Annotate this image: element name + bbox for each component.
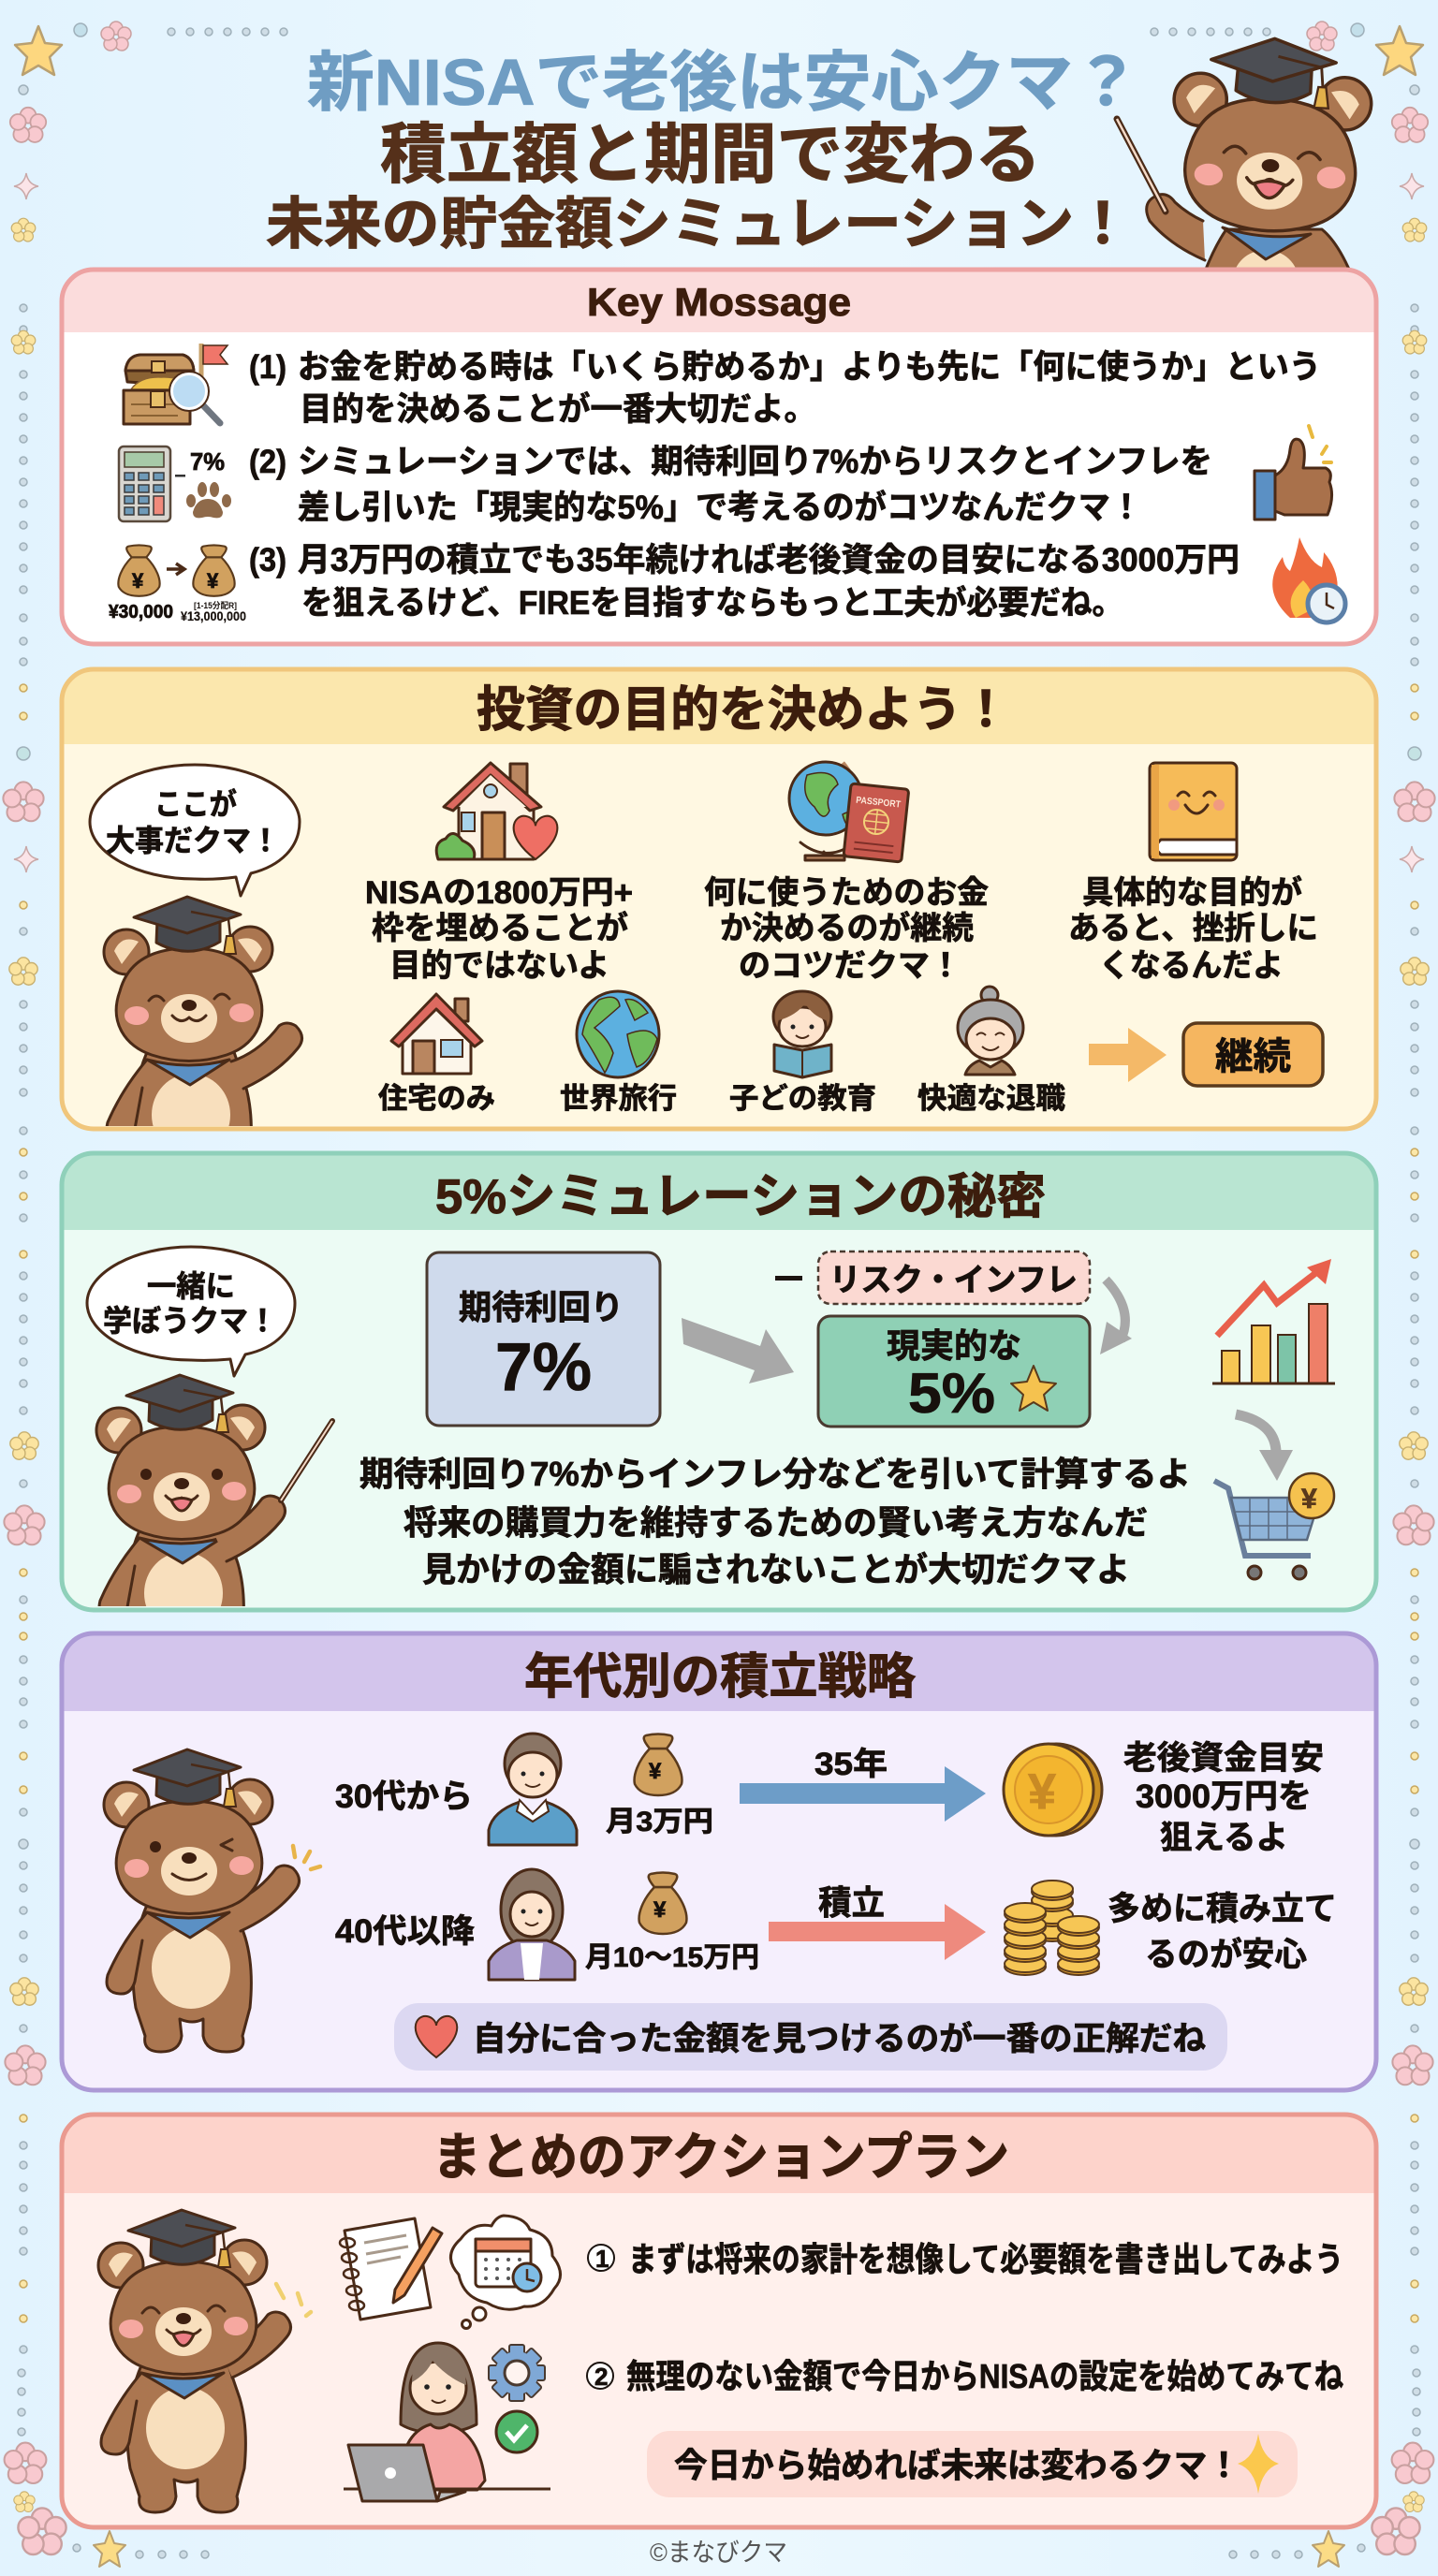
- icon: woman using laptop: [344, 2343, 550, 2501]
- label: monthly 30k: 月3万円: [606, 1807, 713, 1837]
- icon: thumbs up: [1255, 426, 1332, 520]
- heading: 投資の目的を決めよう！: [477, 683, 1010, 738]
- labels: purposes: 子どの教育: [729, 1082, 876, 1115]
- text: column 1: 枠を埋めることが: [372, 910, 628, 946]
- icon: money bag 2: [639, 1872, 686, 1934]
- text: column 2: か決めるのが継続: [720, 910, 974, 946]
- text: save more: [1108, 1891, 1337, 1973]
- footer: copyright: ©まなびクマ: [650, 2539, 787, 2567]
- text: message 2: (2): [249, 444, 286, 480]
- text: retirement target: 3000万円を: [1136, 1778, 1312, 1815]
- text: message 1: [249, 349, 1321, 428]
- icon: check mark: [496, 2411, 537, 2452]
- icon: calculator and paw with 7%: 7%: [190, 447, 225, 476]
- text: action 1: 1: [595, 2245, 609, 2273]
- text: message 1: お金を貯める時は「いくら貯めるか」よりも先に「何に使うか」という: [298, 349, 1321, 386]
- labels: purposes: 世界旅行: [560, 1082, 677, 1115]
- icon: money bags and arrow: ¥: [132, 569, 144, 593]
- icon: shopping cart with yen coin: ¥: [1301, 1484, 1317, 1515]
- box: risk and inflation: リスク・インフレ: [829, 1263, 1078, 1298]
- mascot: winking bear: [104, 1749, 320, 2052]
- icon: gear: [489, 2345, 545, 2401]
- mascot: bear waving: [103, 895, 303, 1126]
- icon: money bags and arrow: ¥30,000: [109, 602, 173, 622]
- arrow: red: 積立: [818, 1883, 885, 1922]
- box: realistic 5%: [818, 1316, 1090, 1427]
- arrow: blue: 35年: [814, 1747, 888, 1782]
- panel: 5% simulation secret: [60, 1151, 1378, 1612]
- labels: purposes: 快適な退職: [917, 1082, 1065, 1115]
- speech bubble: 学ぼうクマ！: [103, 1304, 277, 1338]
- callout: start today: 今日から始めれば未来は変わるクマ！: [674, 2446, 1240, 2484]
- arrow: gray diagonal: [682, 1318, 794, 1383]
- chart: growth bars with rising arrow: [1212, 1259, 1335, 1383]
- icon: money bag 1: [635, 1734, 682, 1795]
- panel: strategy by age: [62, 1633, 1376, 2090]
- labels: purposes: 住宅のみ: [378, 1082, 495, 1115]
- heading: 年代別の積立戦略: [524, 1650, 916, 1705]
- heading: 5%シミュレーションの秘密: [435, 1170, 1046, 1224]
- box: realistic 5%: 現実的な: [887, 1326, 1021, 1365]
- speech bubble: 大事だクマ！: [106, 824, 280, 857]
- button: continue: [1183, 1023, 1323, 1086]
- text: column 1: 目的ではないよ: [389, 948, 609, 984]
- text: save more: るのが安心: [1145, 1937, 1307, 1973]
- title: [266, 46, 1140, 256]
- text: column 3: くなるんだよ: [1099, 948, 1284, 984]
- text: column 2: 何に使うためのお金: [704, 875, 989, 911]
- text: column 2: [704, 875, 989, 984]
- arrow: red: [769, 1883, 986, 1960]
- icon: money bags and arrow: ¥: [207, 569, 219, 593]
- mascot: bear with pointer: [95, 1374, 335, 1606]
- text: message 1: 目的を決めることが一番大切だよ。: [300, 391, 816, 428]
- icon: house with heart: [436, 763, 557, 859]
- text: message 3: [249, 542, 1240, 622]
- text: message 1: (1): [249, 349, 286, 386]
- icon: star: [1011, 1366, 1056, 1411]
- icon: fire and clock: [1272, 537, 1345, 622]
- text: column 2: のコツだクマ！: [739, 948, 961, 984]
- title: 積立額と期間で変わる: [380, 118, 1041, 191]
- text: column 3: 具体的な目的が: [1082, 874, 1302, 911]
- label: from 30s: 30代から: [335, 1778, 473, 1815]
- text: message 3: 月3万円の積立でも35年続ければ老後資金の目安になる3000万円: [298, 542, 1240, 578]
- box: expected return 7%: [427, 1252, 660, 1426]
- box: risk and inflation: [775, 1251, 1090, 1304]
- icon: man: [489, 1734, 577, 1845]
- text: explanation: 将来の購買力を維持するための賢い考え方なんだ: [404, 1503, 1148, 1542]
- button: continue: 継続: [1215, 1036, 1291, 1077]
- text: message 2: シミュレーションでは、期待利回り7%からリスクとインフレを: [298, 444, 1212, 480]
- text: retirement target: 狙えるよ: [1160, 1820, 1288, 1856]
- panel: key message: [62, 270, 1376, 644]
- speech bubble: [87, 1247, 295, 1376]
- icon: money bags and arrow: [109, 545, 246, 623]
- text: column 3: あると、挫折しに: [1068, 911, 1318, 946]
- icon: money bag 2: ¥: [653, 1897, 667, 1923]
- icon: small house: [391, 994, 482, 1074]
- icon: treasure chest with magnifier and flag: [124, 344, 227, 424]
- box: expected return 7%: 期待利回り: [459, 1288, 624, 1326]
- icon: large yen coin: [1004, 1744, 1102, 1836]
- text: column 3: [1068, 874, 1318, 984]
- icon: coin stacks: [1005, 1881, 1099, 1975]
- text: message 3: (3): [249, 542, 286, 578]
- callout: find your amount: [394, 2003, 1227, 2071]
- mascot: bear with pointer (header): [1117, 34, 1374, 312]
- text: message 2: [249, 444, 1212, 526]
- text: retirement target: 老後資金目安: [1123, 1740, 1324, 1777]
- arrow: curved gray to cart: [1236, 1414, 1293, 1481]
- text: action 2: 2: [594, 2363, 608, 2391]
- heading: key message: Key Mossage: [587, 280, 851, 324]
- icon: globe and passport: [789, 762, 909, 862]
- panel: decide your investment goal: [60, 666, 1378, 1131]
- title: 未来の貯金額シミュレーション！: [266, 193, 1132, 256]
- icon: money bags and arrow: [1-15分配R]: [194, 600, 237, 610]
- text: column 1: [365, 875, 633, 984]
- speech bubble: ここが: [154, 787, 237, 821]
- icon: calculator and paw with 7%: [119, 446, 231, 521]
- arrow: to continuation: [1089, 1028, 1167, 1082]
- text: explanation: 見かけの金額に騙されないことが大切だクマよ: [422, 1550, 1130, 1588]
- box: realistic 5%: 5%: [908, 1362, 995, 1425]
- icon: smiling book: [1150, 763, 1237, 860]
- text: save more: 多めに積み立て: [1108, 1891, 1337, 1927]
- icon: notebook and pencil: [340, 2218, 442, 2320]
- icon: money bag 1: ¥: [649, 1759, 662, 1784]
- icon: child reading: [773, 991, 831, 1077]
- title: 新NISAで老後は安心クマ？: [307, 46, 1140, 119]
- panel: action plan: [62, 2115, 1376, 2527]
- icon: money bags and arrow: ¥13,000,000: [181, 608, 246, 623]
- icon: shopping cart with yen coin: [1214, 1473, 1334, 1579]
- text: explanation: 期待利回り7%からインフレ分などを引いて計算するよ: [360, 1455, 1191, 1493]
- label: monthly 100-150k: 月10〜15万円: [585, 1942, 759, 1973]
- arrow: curved gray to realistic: [1100, 1280, 1132, 1354]
- mascot: happy waving bear: [98, 2210, 311, 2512]
- icon: thought bubble with calendar: [450, 2216, 561, 2329]
- icon: globe: [577, 991, 659, 1077]
- box: expected return 7%: 7%: [495, 1330, 592, 1405]
- text: explanation: [360, 1455, 1191, 1588]
- icon: globe and passport: PASSPORT: [856, 796, 902, 811]
- arrow: blue: [740, 1747, 986, 1822]
- text: retirement target: [1123, 1740, 1324, 1856]
- text: message 3: を狙えるけど、FIREを目指すならもっと工夫が必要だね。: [301, 585, 1123, 622]
- text: action 2: 無理のない金額で今日からNISAの設定を始めてみてね: [626, 2357, 1343, 2395]
- heading: まとめのアクションプラン: [433, 2130, 1009, 2186]
- icon: grandmother: [958, 987, 1023, 1075]
- icon: sparkle: [1238, 2434, 1279, 2494]
- icon: large yen coin: ¥: [1028, 1764, 1056, 1820]
- speech bubble: 一緒に: [147, 1269, 235, 1303]
- text: message 2: 差し引いた「現実的な5%」で考えるのがコツなんだクマ！: [298, 490, 1142, 526]
- speech bubble: [90, 765, 300, 896]
- icon: woman: [489, 1869, 575, 1980]
- label: 40s and later: 40代以降: [335, 1913, 475, 1950]
- callout: start today: [647, 2431, 1298, 2497]
- text: column 1: NISAの1800万円+: [365, 875, 633, 911]
- labels: purposes: [378, 1082, 1065, 1115]
- callout: find your amount: 自分に合った金額を見つけるのが一番の正解だね: [473, 2021, 1206, 2057]
